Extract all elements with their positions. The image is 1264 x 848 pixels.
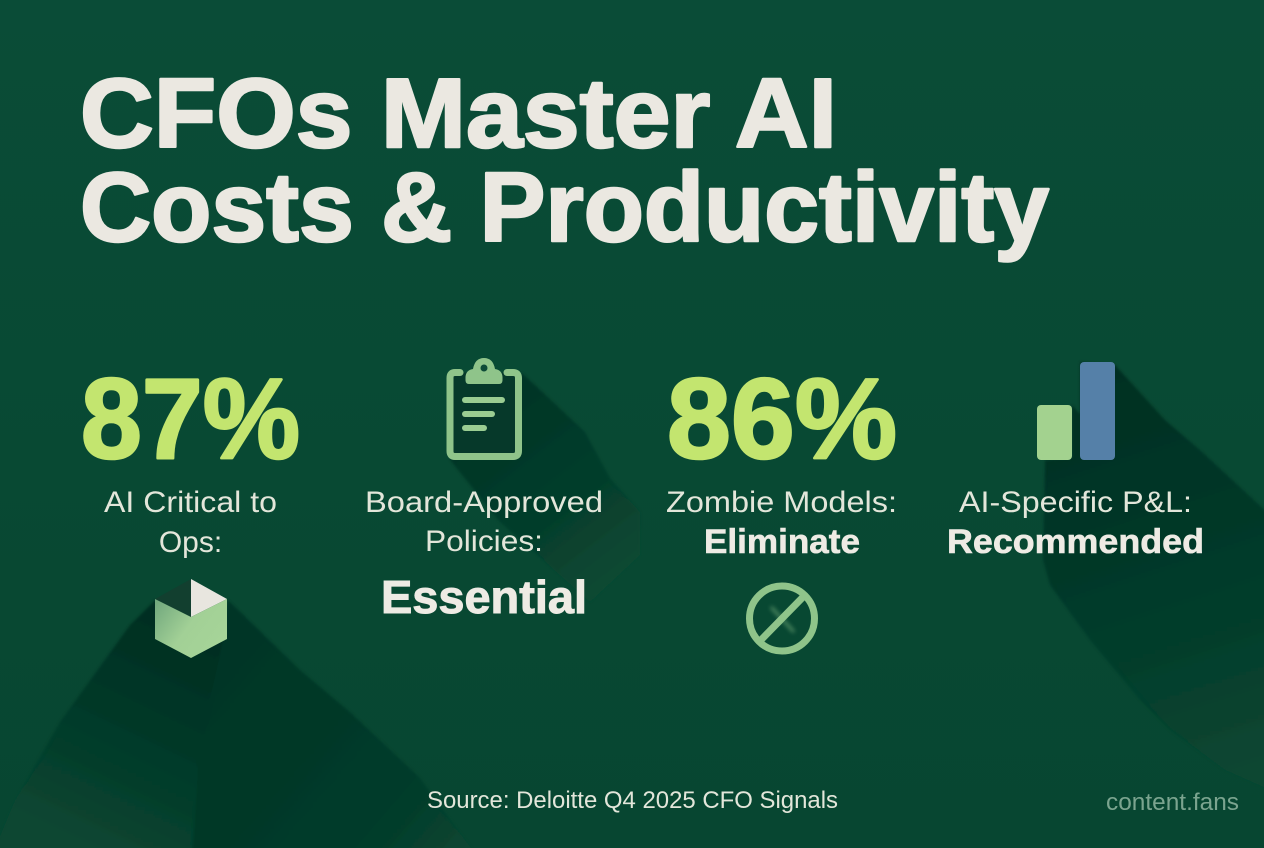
stat column: AI critical to ops	[81, 356, 300, 658]
label: Board-Approved Policies: Board-Approved	[365, 486, 603, 519]
label: Recommended: Recommended	[947, 523, 1204, 561]
label: AI-Specific P&L: AI-Specific P&L:	[959, 486, 1192, 519]
stat: 86%: 86%	[667, 356, 897, 483]
shadow: cube	[0, 600, 480, 848]
label: Board-Approved Policies: Policies:	[425, 525, 543, 558]
title: Costs & Productivity	[80, 152, 1049, 262]
watermark: content.fans	[1106, 789, 1239, 816]
label: Zombie Models: Zombie Models:	[666, 486, 897, 519]
stat: 87%: 87%	[81, 356, 300, 483]
icon: clipboard	[450, 358, 518, 456]
source: Source: Deloitte Q4 2025 CFO Signals	[427, 787, 838, 814]
icon: prohibition sign	[750, 586, 814, 651]
label: AI Critical to Ops	[104, 486, 277, 559]
shadow: bar chart	[1043, 362, 1264, 790]
title	[80, 58, 1049, 262]
stat column: AI-specific P&L	[947, 362, 1204, 561]
label: AI Critical to Ops: Ops:	[159, 526, 222, 559]
stat column: zombie models	[666, 356, 897, 651]
title: CFOs Master AI	[80, 58, 837, 168]
label: Board-Approved Policies	[365, 486, 603, 558]
icon: cube	[155, 579, 227, 658]
label: Eliminate: Eliminate	[704, 523, 860, 561]
label: AI Critical to Ops: AI Critical to	[104, 486, 277, 519]
shadow: clipboard	[450, 373, 640, 602]
icon: bar chart	[1037, 362, 1115, 460]
label: Essential: Essential	[381, 571, 587, 623]
stat column: board-approved policies	[365, 358, 603, 623]
